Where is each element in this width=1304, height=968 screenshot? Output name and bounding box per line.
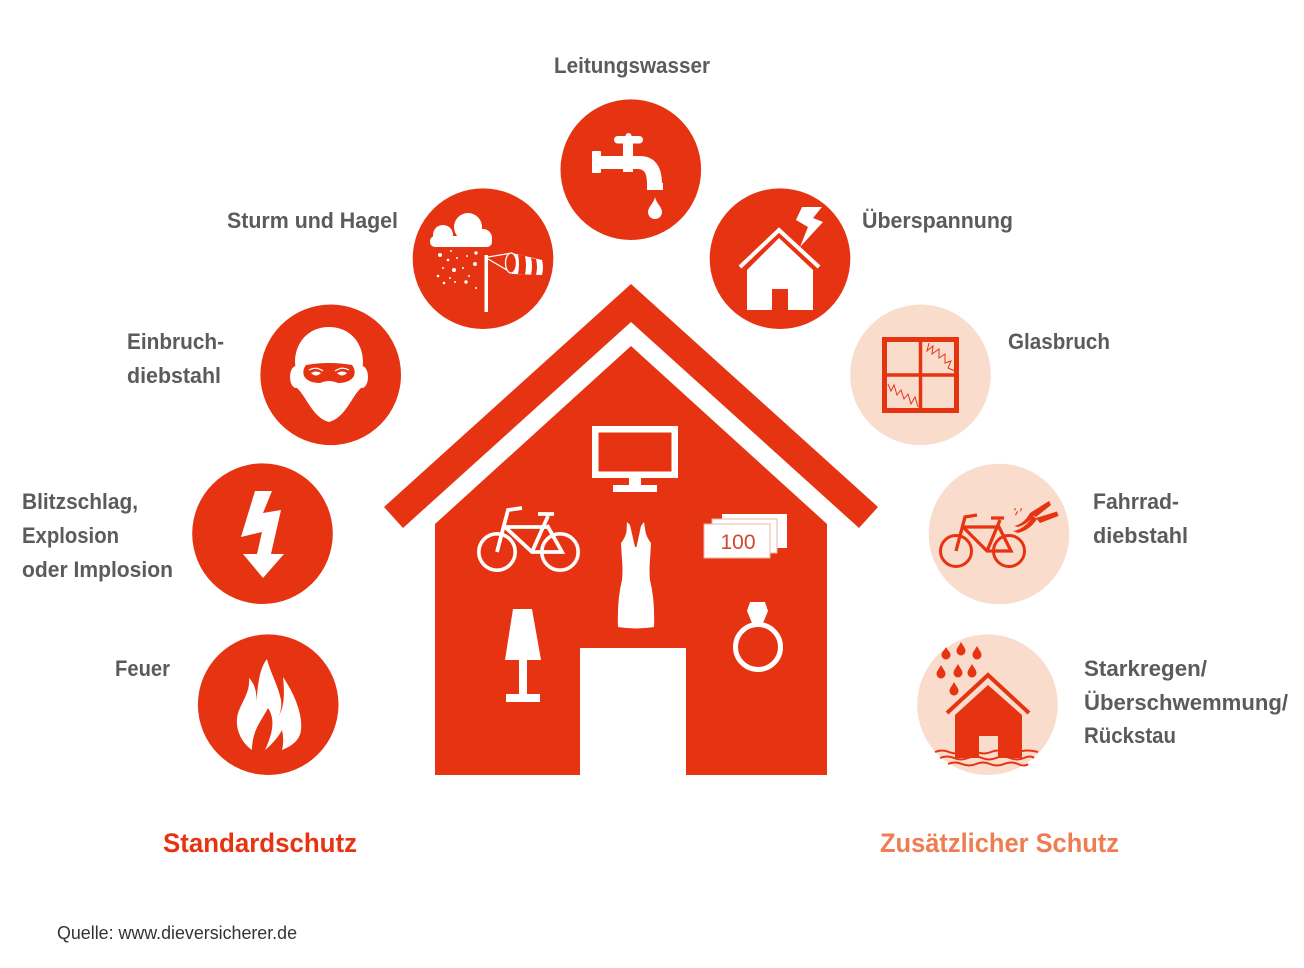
label: Fahrraddiebstahl: Fahrrad-: [1093, 489, 1179, 514]
icon: television: [592, 426, 678, 492]
label: Einbruchdiebstahl: [127, 329, 224, 388]
icon: masked burglar: [290, 327, 368, 422]
icon: cloud with hail: [430, 213, 492, 289]
label: Glasbruch: Glasbruch: [1008, 329, 1110, 354]
icon: broken window: [884, 339, 957, 411]
label: Fahrraddiebstahl: [1093, 489, 1188, 548]
icon: house with lightning: [740, 207, 823, 310]
heading: Zusätzlicher Schutz: Zusätzlicher Schutz: [880, 828, 1119, 858]
icon: lamp: [505, 609, 541, 702]
circle: Blitzschlag: [192, 463, 333, 604]
label: Blitzschlag, Explosion oder Implosion: oder Implosion: [22, 557, 173, 582]
icon: flooded house with rain: [935, 642, 1038, 766]
label: Starkregen, Überschwemmung, Rückstau: Rückstau: [1084, 723, 1176, 748]
label: Sturm und Hagel: Sturm und Hagel: [227, 208, 398, 233]
circle: Glasbruch: [850, 304, 991, 445]
icon: banknotes: 100: [720, 531, 756, 554]
icon: ring: [736, 602, 780, 670]
label: Fahrraddiebstahl: diebstahl: [1093, 523, 1188, 548]
icon: bicycle: [479, 508, 578, 570]
icon: windsock: [484, 253, 543, 312]
icon: pliers: [1013, 501, 1058, 533]
circle: Sturm und Hagel: [413, 188, 553, 329]
circle: Fahrraddiebstahl: [929, 464, 1069, 604]
circle: Einbruchdiebstahl: [260, 304, 401, 445]
circle: Feuer: [198, 634, 338, 775]
label: Starkregen, Überschwemmung, Rückstau: Starkregen/: [1084, 656, 1207, 681]
icon: lightning arrow: [241, 491, 284, 578]
label: Blitzschlag, Explosion oder Implosion: [22, 489, 173, 582]
label: Leitungswasser: Leitungswasser: [554, 53, 710, 78]
house body: [435, 346, 827, 775]
label: Starkregen, Überschwemmung, Rückstau: Überschwemmung/: [1084, 690, 1288, 715]
circle: Starkregen: [917, 634, 1058, 775]
icon: flame: [237, 659, 301, 750]
label: Überspannung: Überspannung: [862, 208, 1013, 233]
source note: Quelle: www.dieversicherer.de: [57, 923, 297, 943]
circle: Überspannung: [710, 188, 850, 329]
label: Blitzschlag, Explosion oder Implosion: Blitzschlag,: [22, 489, 138, 514]
central house: [384, 284, 878, 775]
icon: dress: [618, 522, 654, 628]
label: Einbruchdiebstahl: Einbruch-: [127, 329, 224, 354]
label: Starkregen, Überschwemmung, Rückstau: [1084, 656, 1288, 748]
house roof: [384, 284, 878, 528]
heading: Standardschutz: Standardschutz: [163, 828, 357, 858]
label: Einbruchdiebstahl: diebstahl: [127, 363, 221, 388]
icon: banknotes: [704, 514, 787, 558]
label: Blitzschlag, Explosion oder Implosion: Explosion: [22, 523, 119, 548]
label: Feuer: Feuer: [115, 656, 170, 681]
icon: water tap: [592, 133, 663, 219]
icon: bicycle: [940, 515, 1024, 566]
circle: Leitungswasser: [560, 99, 701, 240]
